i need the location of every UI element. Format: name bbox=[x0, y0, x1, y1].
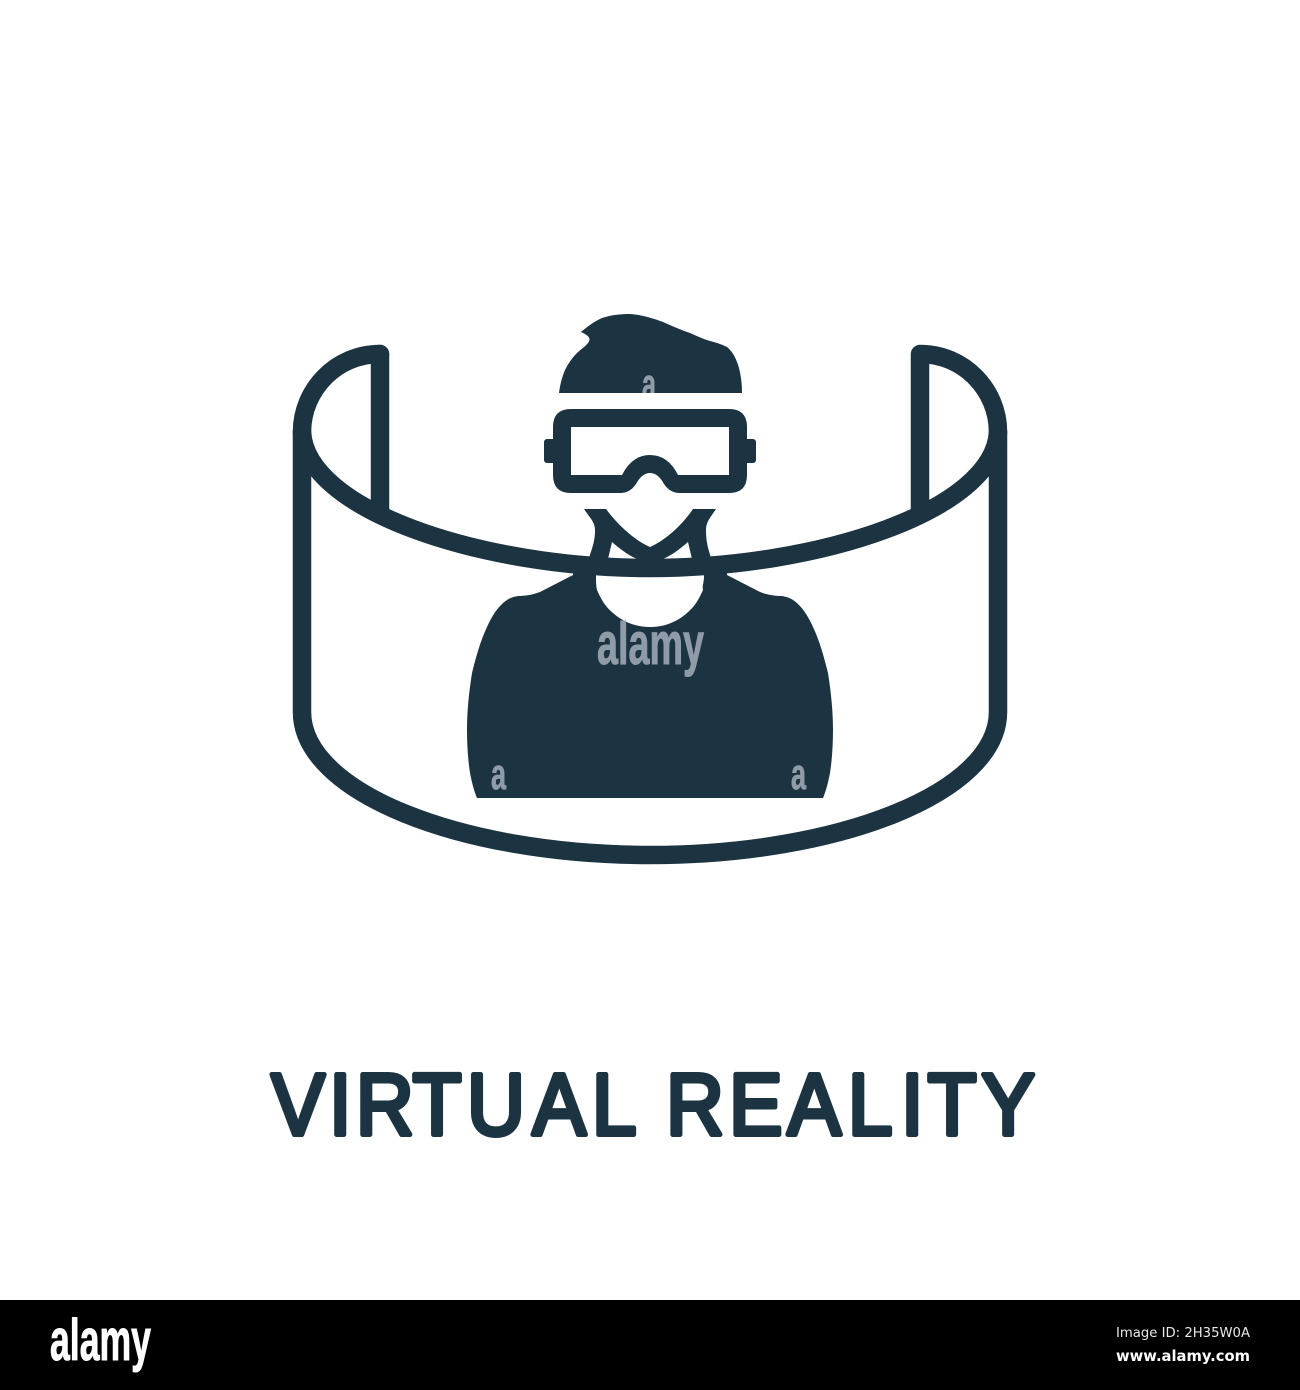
watermark letter: hair: a bbox=[642, 360, 656, 409]
footer bar bbox=[0, 1300, 1300, 1390]
person torso bbox=[467, 570, 833, 798]
person jaw and neck bbox=[584, 509, 716, 572]
watermark letter: left: a bbox=[491, 750, 506, 799]
infographic canvas bbox=[0, 314, 1300, 1390]
title: VIRTUAL REALITY bbox=[271, 1055, 1035, 1153]
watermark letter: right: a bbox=[791, 750, 806, 799]
person hair bbox=[559, 314, 742, 393]
website: www.alamy.com bbox=[1116, 1347, 1250, 1365]
watermark: centre: alamy bbox=[597, 611, 704, 677]
VR goggles bbox=[544, 409, 756, 493]
footer logo: alamy bbox=[50, 1308, 151, 1373]
image id: Image ID: 2H35W0A bbox=[1116, 1325, 1251, 1341]
icon: virtual reality user inside curved screen bbox=[302, 314, 998, 855]
curved screen bbox=[302, 354, 998, 855]
